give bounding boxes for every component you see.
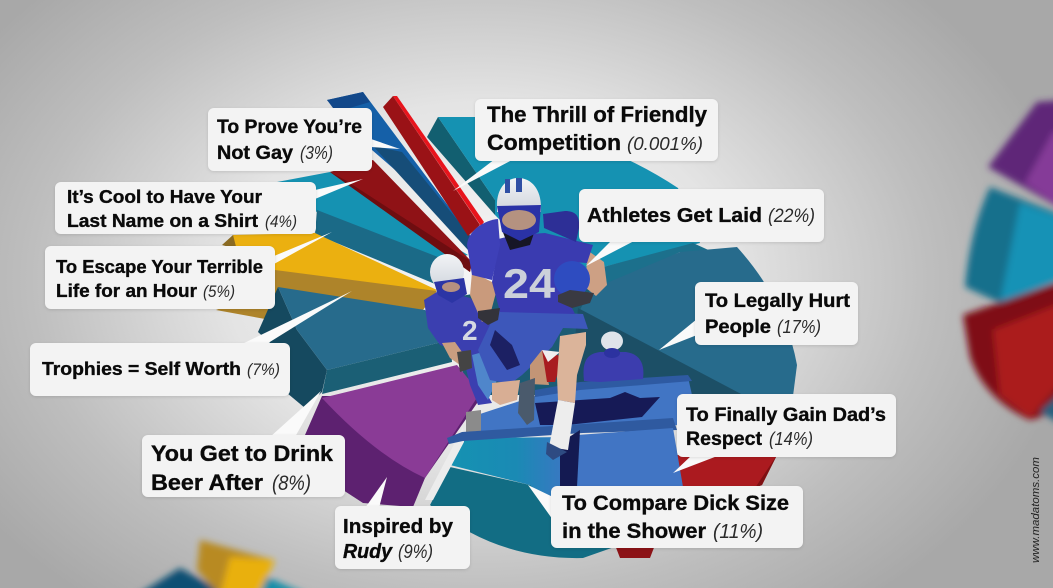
slice: to prove you're not gay xyxy=(327,92,472,250)
pointer xyxy=(528,485,553,520)
text: (22%) xyxy=(768,206,815,227)
helmet xyxy=(497,178,541,212)
text: To Compare Dick Size xyxy=(562,492,789,515)
text: To Prove You’re xyxy=(217,117,362,138)
text: (8%) xyxy=(272,472,311,495)
callout: athletes get laid xyxy=(579,189,824,266)
pants xyxy=(478,310,588,384)
callout: trophies = self worth xyxy=(30,291,352,396)
sock xyxy=(549,400,575,450)
text: (5%) xyxy=(203,282,235,301)
callout: compare in the shower xyxy=(528,485,803,548)
text: (0.001%) xyxy=(627,134,703,154)
face xyxy=(442,282,460,292)
text xyxy=(686,405,886,450)
text: Athletes Get Laid xyxy=(587,205,762,227)
left shoulder pad xyxy=(467,219,500,280)
text: Not Gay xyxy=(217,143,293,164)
right arm xyxy=(586,250,607,296)
slice: athletes get laid xyxy=(438,117,700,300)
text: (11%) xyxy=(713,521,763,543)
slice: thrill of friendly competition xyxy=(383,96,484,236)
body xyxy=(424,290,498,405)
text: Trophies = Self Worth xyxy=(42,359,241,379)
shorts shadow xyxy=(490,330,520,370)
rear shoe xyxy=(518,378,535,425)
blocking mats xyxy=(447,375,692,487)
text: You Get to Drink xyxy=(151,441,334,466)
text: (3%) xyxy=(300,143,333,163)
text: Last Name on a Shirt xyxy=(67,211,258,231)
pointer xyxy=(315,179,363,199)
slice: escape your terrible life xyxy=(216,233,437,319)
face mask xyxy=(497,205,541,241)
slice: dark red wedge xyxy=(330,160,472,272)
text: The Thrill of Friendly xyxy=(487,102,708,127)
text: To Legally Hurt xyxy=(705,291,851,312)
credit url: www.madatoms.com xyxy=(1030,457,1042,563)
text xyxy=(67,187,297,231)
center filler behind players xyxy=(440,270,610,395)
pointer xyxy=(371,139,400,149)
shorts xyxy=(472,350,498,400)
shadowed thigh xyxy=(530,350,549,385)
callout: escape your terrible life xyxy=(45,232,332,309)
text: To Escape Your Terrible xyxy=(56,257,263,277)
pointer xyxy=(586,240,636,266)
mask xyxy=(434,278,467,303)
callout: finally gain dad's respect xyxy=(673,394,896,473)
text: Inspired by xyxy=(343,516,454,538)
text xyxy=(151,441,334,495)
front leg xyxy=(557,332,586,403)
slice: thrill of competition side xyxy=(427,117,495,215)
main player number 24 xyxy=(467,178,607,460)
left arm xyxy=(470,272,498,322)
blurred pie fragment: right xyxy=(963,100,1053,426)
blurred pie fragment: bottom left xyxy=(136,540,310,588)
pointer xyxy=(274,232,332,264)
number 24: 24 xyxy=(503,260,556,307)
callout: thrill of friendly competition xyxy=(453,99,718,191)
helmet stripes xyxy=(505,178,522,193)
slice: finally gain dad's respect xyxy=(615,455,777,558)
text: To Finally Gain Dad’s xyxy=(686,405,886,426)
slice: last name on a shirt xyxy=(277,172,468,284)
text xyxy=(217,117,362,164)
red pad xyxy=(542,350,563,382)
text: Rudy xyxy=(343,541,393,563)
text xyxy=(705,291,851,338)
pointer xyxy=(240,291,352,345)
pointer xyxy=(365,477,387,508)
jersey xyxy=(492,233,593,314)
slice: inspired by rudy xyxy=(305,365,482,507)
jersey xyxy=(584,352,643,382)
helmet xyxy=(601,332,623,350)
face mask xyxy=(604,348,620,358)
rear leg xyxy=(492,380,520,405)
text: in the Shower xyxy=(562,520,706,543)
pointer xyxy=(673,455,720,473)
player behind xyxy=(424,254,498,405)
right shoulder pad xyxy=(543,211,579,242)
text xyxy=(56,257,263,301)
shoe xyxy=(546,442,567,460)
text: (7%) xyxy=(247,360,280,379)
text: Beer After xyxy=(151,470,263,495)
face xyxy=(502,210,536,230)
text: It’s Cool to Have Your xyxy=(67,187,262,207)
text: Respect xyxy=(686,429,763,450)
text xyxy=(562,492,789,543)
text: (9%) xyxy=(398,542,433,563)
glove xyxy=(457,350,472,372)
pointer xyxy=(659,319,697,350)
callout: legally hurt people xyxy=(659,282,858,350)
text xyxy=(343,516,454,563)
pointer xyxy=(270,391,321,437)
pointer xyxy=(453,159,514,191)
callout: to prove you're not gay xyxy=(208,108,400,171)
chin strap neck xyxy=(502,230,535,250)
number: 2 xyxy=(462,315,478,346)
text xyxy=(487,102,708,155)
gloves xyxy=(558,290,594,308)
callout: last name on a shirt xyxy=(55,179,363,234)
slice: legally hurt people xyxy=(570,243,797,400)
slice: compare in the shower xyxy=(430,437,620,558)
text: Competition xyxy=(487,130,621,155)
arm xyxy=(442,342,462,365)
text: (4%) xyxy=(265,212,297,231)
callout: drink beer after xyxy=(142,391,345,497)
text: People xyxy=(705,317,771,338)
text: (17%) xyxy=(777,317,821,337)
slice: trophies = self worth xyxy=(258,287,452,408)
callout: inspired by rudy xyxy=(335,477,470,569)
text: Life for an Hour xyxy=(56,281,197,301)
exploded 3D pie chart xyxy=(216,92,797,558)
text: (14%) xyxy=(769,429,813,449)
helmet xyxy=(430,254,464,290)
player in background xyxy=(584,332,643,382)
football xyxy=(554,261,590,297)
